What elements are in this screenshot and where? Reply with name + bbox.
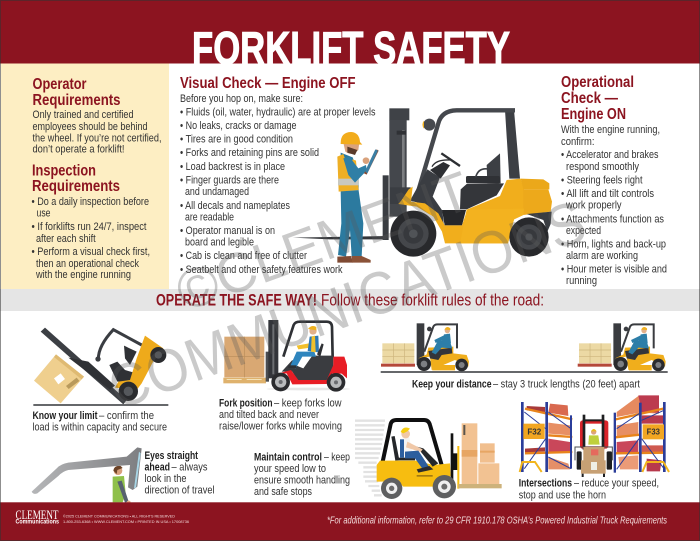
panel: inspection requirements: • If forklifts run 24/7, inspect	[32, 221, 147, 233]
panel: visual check engine off: Before you hop on, make sure:	[180, 93, 303, 105]
band: operate the safe way	[0, 289, 700, 311]
panel: inspection requirements: then an operational check	[36, 258, 139, 270]
caption: fork position: raise/lower forks while moving	[219, 421, 342, 433]
panel: operator requirements: don’t operate a forklift!	[32, 144, 124, 156]
caption: eyes straight ahead: – always	[172, 462, 208, 474]
illustration: worker with clipboard	[337, 132, 379, 263]
panel: requirements background	[1, 64, 169, 289]
panel: inspection requirements: use	[36, 208, 50, 220]
panel: visual check engine off: • Load backrest is in place	[180, 161, 285, 173]
band: operate the safe way: OPERATE THE SAFE WAY!	[156, 292, 317, 310]
panel: operational check engine on: • Steering feels right	[561, 175, 643, 187]
panel: operational check engine on: alarm are working	[566, 250, 638, 262]
footer copyright text: 1-800-253-6368 • WWW.CLEMENT.COM • PRINTED IN USA • 17008736	[63, 519, 190, 524]
panel: visual check engine off: board and legible	[185, 237, 254, 249]
panel: visual check engine off: • No leaks, cracks or damage	[180, 120, 296, 132]
panel: operational check engine on: • Accelerator and brakes	[561, 149, 659, 161]
caption: fork position: and tilted back and never	[219, 409, 319, 421]
band: operate the safe way: Follow these forklift rules of the road:	[321, 292, 544, 310]
panel: operator requirements: Requirements	[32, 92, 121, 109]
panel: visual check engine off: • All decals and nameplates	[180, 200, 290, 212]
illustration: warehouse intersection racks	[520, 395, 669, 477]
caption: maintain control: ensure smooth handling	[254, 475, 350, 487]
caption: eyes straight ahead: direction of travel	[144, 484, 214, 496]
caption: eyes straight ahead	[144, 450, 214, 496]
illustration: tipping forklift	[33, 328, 168, 406]
panel: inspection requirements: after each shift	[36, 233, 96, 245]
caption: know your limit	[32, 410, 167, 434]
panel: visual check engine off: • Forks and retaining pins are solid	[180, 147, 319, 159]
panel: visual check engine off: and undamaged	[185, 186, 249, 198]
illustration: moving yellow forklift with boxes	[355, 420, 502, 499]
panel: inspection requirements: • Perform a visual check first,	[32, 246, 150, 258]
panel: operational check engine on: With the engine running,	[561, 124, 660, 136]
center forklift	[575, 415, 612, 477]
caption: fork position	[219, 398, 342, 433]
caption: intersections: Intersections	[519, 478, 572, 490]
illustration: large yellow forklift	[293, 108, 552, 257]
title banner	[0, 0, 700, 74]
panel: operator requirements: employees should be behind	[32, 121, 148, 133]
caption: intersections: stop and use the horn	[519, 489, 606, 501]
panel: visual check engine off: Visual Check — Engine OFF	[180, 75, 356, 92]
panel: operational check engine on: expected	[566, 225, 601, 237]
panel: operational check engine on: respond smoothly	[566, 161, 639, 173]
panel: operational check engine on	[561, 74, 667, 287]
footer band	[0, 502, 700, 541]
right rack	[614, 395, 669, 473]
caption: fork position: – keep forks low	[274, 398, 342, 410]
panel: visual check engine off	[180, 75, 376, 276]
panel: operational check engine on: Operational	[561, 74, 634, 91]
illustration: red forklift with pallet	[223, 320, 350, 392]
panel: operational check engine on: running	[566, 275, 597, 287]
panel: operational check engine on: Engine ON	[561, 106, 626, 123]
watermark: COMMUNICATIONS	[100, 188, 594, 422]
caption: know your limit: Know your limit	[32, 410, 98, 422]
panel: operator requirements: the wheel. If you’re not certified,	[32, 132, 162, 144]
panel: operational check engine on: • Attachments function as	[561, 213, 664, 225]
footer copyright text: ©2025 CLEMENT COMMUNICATIONS • ALL RIGHTS RESERVED	[63, 513, 175, 518]
panel: inspection requirements	[32, 162, 150, 281]
panel: visual check engine off: • Tires are in good condition	[180, 134, 293, 146]
panel: visual check engine off: • Cab is clean and free of clutter	[180, 250, 307, 262]
left rack: F32	[527, 426, 542, 436]
caption: eyes straight ahead: look in the	[144, 473, 186, 485]
panel: visual check engine off: • Seatbelt and other safety features work	[180, 264, 343, 276]
panel: operator requirements	[32, 76, 162, 156]
caption: keep your distance: – stay 3 truck lengths (20 feet) apart	[493, 379, 641, 391]
caption: eyes straight ahead: ahead	[144, 462, 170, 474]
caption: know your limit: load is within capacity and secure	[32, 422, 167, 434]
panel: operational check engine on: • Hour meter is visible and	[561, 264, 667, 276]
panel: visual check engine off: • Fluids (oil, water, hydraulic) are at proper levels	[180, 106, 376, 118]
illustration: mirror with pedestrian	[32, 447, 142, 505]
panel: inspection requirements: • Do a daily inspection before	[32, 196, 149, 208]
right rack: F33	[647, 427, 660, 437]
panel: operational check engine on: work properly	[565, 200, 622, 212]
caption: keep your distance	[412, 379, 641, 391]
panel: operational check engine on: Check —	[561, 90, 618, 107]
panel: operational check engine on: • Horn, lights and back-up	[561, 239, 666, 251]
caption: know your limit: – confirm the	[99, 410, 154, 422]
illustration: forklift two with pallet	[578, 323, 666, 371]
caption: maintain control: Maintain control	[254, 451, 322, 463]
panel: operator requirements: Only trained and certified	[32, 109, 134, 121]
caption: maintain control: and safe stops	[254, 486, 312, 498]
logo: Clement Communications: CLEMENT	[16, 508, 59, 522]
left rack	[520, 402, 572, 472]
logo: Clement Communications: Communications	[16, 519, 59, 526]
panel: visual check engine off: • Finger guards are there	[180, 175, 279, 187]
footer copyright text	[63, 513, 190, 524]
caption: keep your distance: Keep your distance	[412, 379, 492, 391]
panel: inspection requirements: Inspection	[32, 162, 96, 180]
panel: inspection requirements: Requirements	[32, 178, 120, 195]
panel: visual check engine off: are readable	[185, 212, 234, 224]
panel: operator requirements: Operator	[32, 76, 86, 93]
panel: inspection requirements: with the engine running	[35, 269, 131, 281]
title: FORKLIFT SAFETY	[192, 22, 510, 74]
watermark: ©CLEMENT	[168, 159, 479, 323]
panel: visual check engine off: • Operator manual is on	[180, 225, 275, 237]
panel: operational check engine on: • All lift and tilt controls	[561, 188, 654, 200]
panel: operational check engine on: confirm:	[561, 136, 594, 148]
caption: intersections: – reduce your speed,	[574, 478, 659, 490]
caption: fork position: Fork position	[219, 398, 273, 410]
caption: maintain control: your speed low to	[254, 463, 326, 475]
illustration: keep-your-distance ground line	[381, 371, 668, 373]
caption: eyes straight ahead: Eyes straight	[144, 450, 198, 462]
caption: maintain control	[254, 451, 350, 498]
illustration: forklift one with pallet	[381, 323, 469, 371]
logo: Clement Communications	[16, 508, 59, 526]
caption: maintain control: – keep	[324, 451, 350, 463]
caption: intersections	[519, 478, 659, 501]
